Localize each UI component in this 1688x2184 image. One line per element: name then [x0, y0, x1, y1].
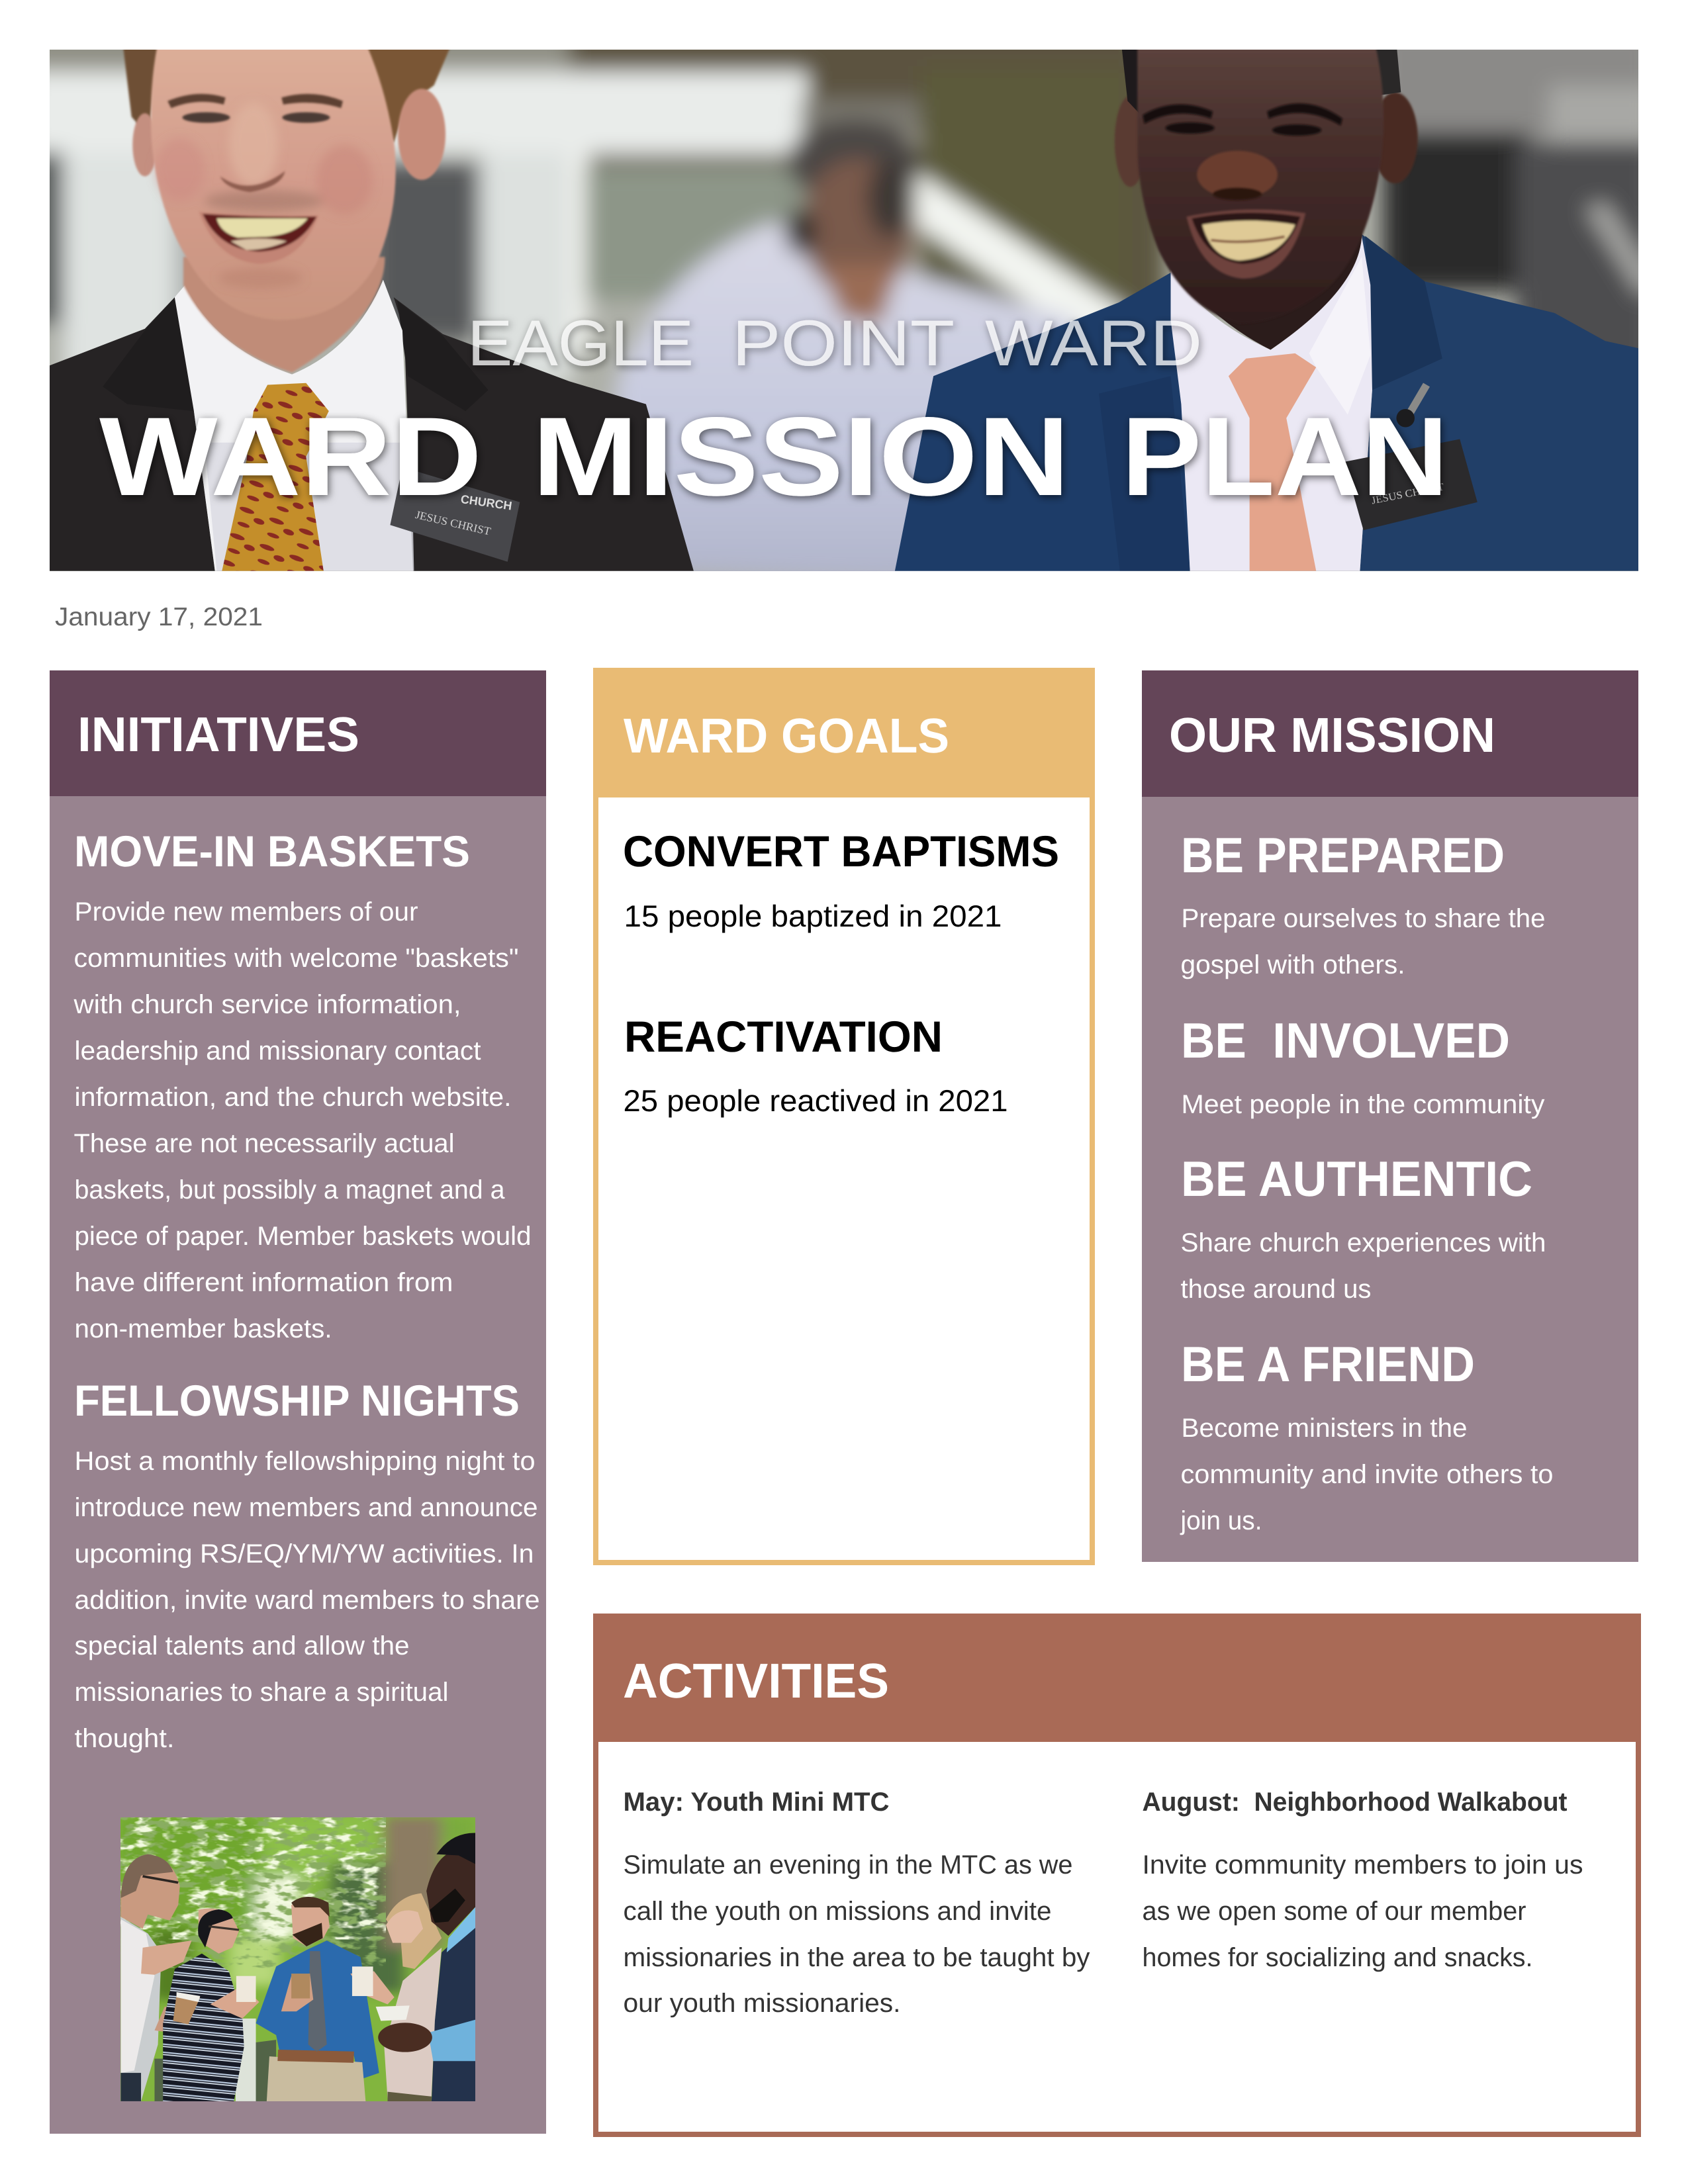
heading: ward goals: WARD GOALS [624, 708, 949, 763]
activity: may [624, 1788, 1090, 2018]
text: fellowship nights [74, 1447, 540, 1753]
person: man with glasses [120, 1854, 199, 2101]
activity: may: Simulate an evening in the MTC as we [624, 1850, 1072, 1880]
activity: august: as we open some of our member [1143, 1897, 1526, 1926]
goal: convert baptisms [623, 827, 1059, 933]
text: move-in baskets: have different information from [74, 1268, 453, 1297]
subtitle: WARD [985, 306, 1202, 379]
goal: reactivation: REACTIVATION [624, 1012, 943, 1061]
brows and eyes [167, 94, 343, 192]
activity: may: missionaries in the area to be taught by [624, 1943, 1090, 1972]
patterned tie [222, 383, 329, 571]
pin [1396, 385, 1427, 428]
item: be involved: BE INVOLVED [1181, 1013, 1510, 1068]
title: MISSION [532, 394, 1070, 519]
item: be a friend: join us. [1180, 1506, 1262, 1535]
item: be authentic: those around us [1181, 1275, 1372, 1304]
item: be prepared [1181, 827, 1545, 979]
sub-heading: move-in baskets: MOVE-IN BASKETS [74, 827, 470, 876]
background fence [154, 2040, 276, 2101]
name tag: JESUS CHRIST [1370, 481, 1445, 506]
heading: activities: ACTIVITIES [623, 1653, 889, 1708]
goal: convert baptisms: 15 people baptized in 2021 [624, 899, 1002, 933]
person: man in vest [376, 1833, 479, 2103]
hair [123, 47, 166, 136]
panel: activities [593, 1614, 1641, 2137]
panel: initiatives [50, 670, 546, 2134]
item: be involved: Meet people in the community [1181, 1090, 1545, 1119]
item: be authentic: Share church experiences with [1181, 1228, 1546, 1257]
item: be a friend [1180, 1336, 1553, 1535]
text: move-in baskets: communities with welcome "baskets" [74, 944, 519, 973]
text: move-in baskets: Provide new members of our [74, 897, 418, 927]
panel: ward goals [593, 668, 1095, 1565]
hair [1121, 47, 1139, 113]
right missionary [895, 47, 1646, 571]
heading: our mission: OUR MISSION [1169, 707, 1495, 762]
activity: august: homes for socializing and snacks. [1143, 1943, 1533, 1972]
name tag [1344, 439, 1477, 530]
item: be a friend: Become ministers in the [1181, 1414, 1467, 1443]
goal: reactivation: 25 people reactived in 2021 [624, 1083, 1008, 1118]
shirt [1171, 236, 1372, 571]
text: move-in baskets: piece of paper. Member baskets would [74, 1222, 531, 1251]
item: be authentic: BE AUTHENTIC [1181, 1151, 1532, 1206]
text: move-in baskets: baskets, but possibly a magnet and a [74, 1175, 505, 1205]
blurred truck background [50, 50, 1638, 571]
item: be prepared: BE PREPARED [1181, 827, 1505, 883]
subtitle [467, 306, 1202, 379]
heading: initiatives: INITIATIVES [77, 707, 359, 762]
hero photo: two smiling missionaries [50, 50, 1638, 571]
mouth [199, 212, 318, 264]
text: move-in baskets: These are not necessarily actual [74, 1129, 454, 1158]
jacket [50, 295, 215, 571]
neck [183, 257, 385, 373]
text: fellowship nights: thought. [74, 1724, 175, 1753]
item: be prepared: Prepare ourselves to share the [1181, 904, 1545, 933]
title: WARD [99, 394, 482, 519]
name tag: JESUS CHRIST [414, 508, 492, 537]
goal: convert baptisms: CONVERT BAPTISMS [623, 827, 1059, 876]
salmon tie [1229, 353, 1316, 571]
text: move-in baskets: non-member baskets. [74, 1314, 332, 1343]
activity: may: our youth missionaries. [624, 1989, 900, 2018]
item: be involved [1181, 1013, 1545, 1119]
text: fellowship nights: special talents and allow the [74, 1631, 409, 1661]
person: blonde woman [384, 1893, 442, 2101]
activity: august: Invite community members to join us [1143, 1850, 1583, 1880]
name tag [390, 467, 520, 562]
shirt [175, 280, 413, 571]
jacket [895, 273, 1190, 571]
activity: august [1143, 1788, 1583, 1972]
text: fellowship nights: missionaries to share a spiritual [74, 1678, 449, 1707]
item: be a friend: BE A FRIEND [1181, 1336, 1475, 1392]
activity: may: call the youth on missions and invite [624, 1897, 1051, 1926]
goal: reactivation [624, 1012, 1008, 1118]
text: move-in baskets: with church service information, [73, 990, 461, 1019]
date: January 17, 2021 [55, 603, 263, 631]
panel: our mission [1142, 670, 1638, 1562]
face [1137, 47, 1383, 324]
item: be a friend: community and invite others to [1181, 1460, 1553, 1489]
person: woman in striped shirt [163, 1909, 259, 2101]
person: man in blue shirt and tie [256, 1897, 395, 2101]
left missionary [50, 47, 694, 571]
subtitle: POINT [732, 306, 955, 379]
ears [398, 89, 445, 180]
neck [1171, 229, 1362, 350]
photo: group of friends with coffee [119, 1817, 479, 2103]
text: move-in baskets [73, 897, 531, 1343]
sub-heading: fellowship nights: FELLOWSHIP NIGHTS [74, 1376, 520, 1425]
activity: august: August: Neighborhood Walkabout [1143, 1788, 1568, 1817]
title: PLAN [1121, 394, 1448, 519]
face [151, 47, 396, 320]
activity: may: May: Youth Mini MTC [624, 1788, 890, 1817]
item: be authentic [1181, 1151, 1546, 1304]
hero banner [50, 50, 1638, 571]
subtitle: EAGLE [467, 306, 694, 379]
text: move-in baskets: information, and the church website. [74, 1083, 511, 1112]
name tag: CHURCH [460, 492, 513, 513]
collar wing [1309, 257, 1370, 414]
text: fellowship nights: Host a monthly fellowshipping night to [74, 1447, 535, 1476]
text: fellowship nights: addition, invite ward members to share [74, 1586, 540, 1615]
text: move-in baskets: leadership and missionary contact [74, 1036, 481, 1066]
text: fellowship nights: upcoming RS/EQ/YM/YW activities. In [74, 1539, 534, 1569]
item: be prepared: gospel with others. [1181, 950, 1405, 979]
title [99, 394, 1448, 519]
ears [1115, 96, 1146, 187]
text: fellowship nights: introduce new members and announce [74, 1493, 538, 1522]
